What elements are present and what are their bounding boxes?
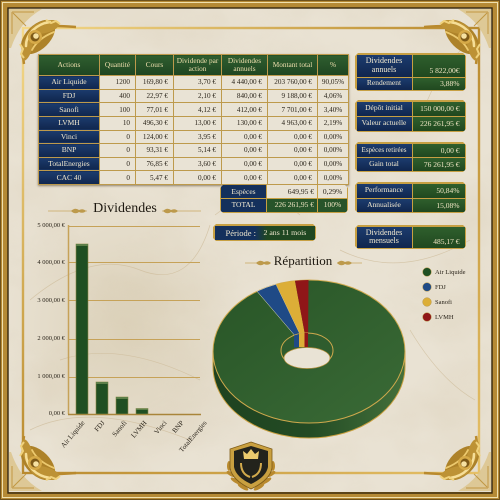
table header row: Dividende par action: [177, 56, 218, 73]
ornament: Répartition flourishes: [245, 260, 362, 266]
row: Sanofi: 7 701,00 €: [281, 106, 312, 114]
row: FDJ: FDJ: [63, 91, 75, 100]
initial deposit: [357, 102, 465, 116]
row: CAC 40: CAC 40: [57, 173, 81, 182]
row: Air Liquide: 203 760,00 €: [274, 78, 312, 86]
row: Vinci: Vinci: [61, 132, 77, 141]
row: FDJ: [39, 90, 348, 102]
x axis labels: TotalEnergies: [178, 419, 209, 454]
performance: Performance: [365, 185, 403, 194]
donut side wall: [213, 352, 405, 438]
row: BNP: 93,31 €: [146, 146, 168, 154]
row: BNP: 5,14 €: [198, 146, 216, 154]
table header row: Montant total: [273, 60, 312, 69]
row: Vinci: 124,00 €: [143, 133, 168, 141]
row: LVMH: 2,19%: [324, 119, 342, 127]
cash withdrawn: [357, 144, 465, 157]
row: Vinci: 0,00 €: [294, 133, 312, 141]
donut top: Air Liquide slice: [213, 280, 405, 423]
y axis labels: 5 000,00 €: [37, 222, 66, 229]
x axis labels: Sanofi: [111, 419, 129, 438]
total gain: [357, 158, 465, 171]
legend item: FDJ: FDJ: [435, 284, 446, 291]
donut chart: Répartition: [212, 280, 406, 438]
current value: [357, 117, 465, 131]
row: LVMH: 10: [123, 119, 130, 127]
row: TotalEnergies: 0,00 €: [244, 160, 262, 168]
legend item: Air Liquide: Air Liquide: [435, 269, 466, 276]
row: Air Liquide: 4 440,00 €: [231, 78, 262, 86]
donut hole: [281, 333, 333, 368]
row: Sanofi: 77,01 €: [146, 106, 168, 114]
bar: Sanofi: [116, 397, 128, 414]
row: BNP: BNP: [62, 145, 76, 154]
y axis labels: 4 000,00 €: [37, 259, 66, 266]
total row: 100%: [324, 200, 341, 209]
performance: 50,84%: [436, 186, 460, 195]
y axis labels: 3 000,00 €: [37, 297, 66, 304]
annual dividends: Dividendes: [366, 56, 402, 65]
row: CAC 40: [39, 171, 348, 184]
yield: [357, 78, 465, 90]
row: LVMH: [39, 117, 348, 130]
row: LVMH: 13,00 €: [194, 119, 216, 127]
row: FDJ: 400: [119, 92, 130, 100]
panel: monthly dividends: 485,17 €: [433, 236, 460, 246]
slice: Sanofi: [276, 281, 308, 351]
row: TotalEnergies: 76,85 €: [146, 160, 168, 168]
performance: [357, 184, 465, 198]
row: TotalEnergies: 0: [126, 160, 130, 168]
x axis labels: BNP: [171, 419, 186, 435]
table header row: Actions: [58, 60, 80, 69]
icon: crest with crown and laurel: [226, 442, 276, 490]
panel: period: [213, 224, 316, 241]
annualised: Annualisée: [367, 200, 401, 209]
row: Sanofi: Sanofi: [59, 105, 79, 114]
table header row: [39, 55, 348, 184]
y axis labels: 0,00 €: [49, 410, 66, 417]
y axis labels: 2 000,00 €: [37, 335, 66, 342]
row: BNP: 0,00%: [324, 146, 342, 154]
cash row: Espèces: [231, 187, 256, 196]
row: LVMH: LVMH: [58, 118, 80, 127]
annual dividends: annuels: [372, 64, 396, 74]
row: Vinci: 0,00 €: [244, 133, 262, 141]
x axis labels: [59, 419, 209, 454]
y axis labels: [37, 222, 66, 417]
table header row: Cours: [146, 60, 163, 69]
total row: [221, 199, 347, 212]
row: CAC 40: 0,00 €: [294, 174, 312, 182]
row: FDJ: 2,10 €: [198, 92, 216, 100]
row: LVMH: 130,00 €: [237, 119, 262, 127]
row: Sanofi: 100: [119, 106, 130, 114]
totals block: cash and total: [220, 185, 348, 213]
heading: Répartition: Répartition: [274, 253, 332, 268]
row: Vinci: 3,95 €: [198, 133, 216, 141]
x axis labels: Air Liquide: [59, 419, 87, 449]
initial deposit: Dépôt initial: [365, 103, 403, 112]
total row: 226 261,95 €: [275, 200, 314, 209]
initial deposit: 150 000,00 €: [420, 104, 460, 113]
row: BNP: 0,00 €: [244, 146, 262, 154]
row: Air Liquide: 90,05%: [322, 78, 344, 86]
row: Sanofi: 412,00 €: [237, 106, 262, 114]
table header row: %: [330, 60, 336, 69]
row: Sanofi: [39, 103, 348, 116]
table header row: Quantité: [105, 60, 130, 69]
row: CAC 40: 0: [126, 174, 130, 182]
annualised: [357, 199, 465, 212]
panel: initial deposit and current value: [355, 100, 466, 132]
row: LVMH: 496,30 €: [143, 119, 168, 127]
row: FDJ: 4,06%: [324, 92, 342, 100]
bar: FDJ: [96, 382, 108, 414]
row: TotalEnergies: 0,00 €: [294, 160, 312, 168]
cash row: 0,29%: [323, 187, 342, 196]
row: Sanofi: 3,40%: [324, 106, 342, 114]
slice: LVMH: [295, 280, 308, 351]
panel: monthly dividends: Dividendes: [366, 228, 402, 236]
row: FDJ: 840,00 €: [237, 92, 262, 100]
x axis labels: LVMH: [130, 419, 149, 440]
legend: [422, 268, 466, 322]
panel: monthly dividends: mensuels: [369, 236, 399, 245]
cash row: 649,95 €: [288, 187, 314, 196]
row: Air Liquide: 1200: [116, 78, 130, 86]
row: BNP: [39, 144, 348, 157]
total gain: Gain total: [369, 159, 399, 168]
slice: FDJ: [257, 284, 308, 351]
row: CAC 40: 0,00 €: [244, 174, 262, 182]
current value: 226 261,95 €: [420, 119, 460, 128]
x axis labels: Vinci: [153, 419, 169, 436]
annual dividends: 5 822,00€: [430, 66, 460, 74]
row: Vinci: [39, 131, 348, 143]
row: Air Liquide: 3,70 €: [198, 78, 216, 86]
bar: Air Liquide: [76, 244, 88, 414]
row: BNP: 0,00 €: [294, 146, 312, 154]
row: TotalEnergies: [39, 158, 348, 170]
panel: performance and annualised: [355, 182, 466, 213]
bar: LVMH: [136, 408, 148, 414]
holdings table: [38, 54, 349, 185]
y axis labels: 1 000,00 €: [37, 373, 66, 380]
row: BNP: 0: [126, 146, 130, 154]
yield: Rendement: [367, 78, 401, 87]
row: CAC 40: 0,00%: [324, 174, 342, 182]
heading: Dividendes: Dividendes: [93, 201, 157, 216]
panel: monthly dividends: [355, 225, 466, 249]
yield: 3,88%: [440, 79, 460, 88]
panel: period: 2 ans 11 mois: [264, 228, 306, 236]
panel: cash withdrawn and total gain: [355, 142, 466, 172]
table header row: Dividendes annuels: [228, 56, 261, 73]
row: TotalEnergies: TotalEnergies: [48, 159, 90, 168]
cash withdrawn: Espèces retirées: [362, 146, 406, 154]
legend item: Sanofi: Sanofi: [435, 299, 452, 306]
total row: TOTAL: [232, 200, 255, 209]
cash row: [221, 185, 347, 198]
row: Air Liquide: Air Liquide: [51, 77, 87, 86]
row: CAC 40: 5,47 €: [150, 174, 168, 182]
row: Sanofi: 4,12 €: [198, 106, 216, 114]
legend item: LVMH: LVMH: [435, 314, 454, 321]
row: Air Liquide: [39, 76, 348, 89]
row: TotalEnergies: 3,60 €: [198, 160, 216, 168]
ornament: Dividendes flourishes: [48, 208, 201, 214]
row: Vinci: 0,00%: [324, 133, 342, 141]
total gain: 76 261,95 €: [424, 160, 460, 168]
row: FDJ: 22,97 €: [146, 92, 168, 100]
row: CAC 40: 0,00 €: [198, 174, 216, 182]
current value: Valeur actuelle: [362, 118, 406, 127]
panel: period: Période :: [226, 228, 256, 238]
panel: annual dividends and yield: [355, 53, 466, 91]
row: LVMH: 4 963,00 €: [281, 119, 312, 127]
row: Air Liquide: 169,80 €: [143, 78, 168, 86]
cash withdrawn: 0,00 €: [441, 146, 460, 154]
annualised: 15,08%: [436, 200, 460, 210]
x axis labels: FDJ: [93, 419, 107, 433]
gridlines and axes: [68, 225, 201, 414]
row: TotalEnergies: 0,00%: [324, 160, 342, 168]
row: FDJ: 9 188,00 €: [281, 92, 312, 100]
bar chart: Dividendes: [37, 222, 209, 454]
annual dividends: [357, 55, 465, 77]
row: Vinci: 0: [126, 133, 130, 141]
